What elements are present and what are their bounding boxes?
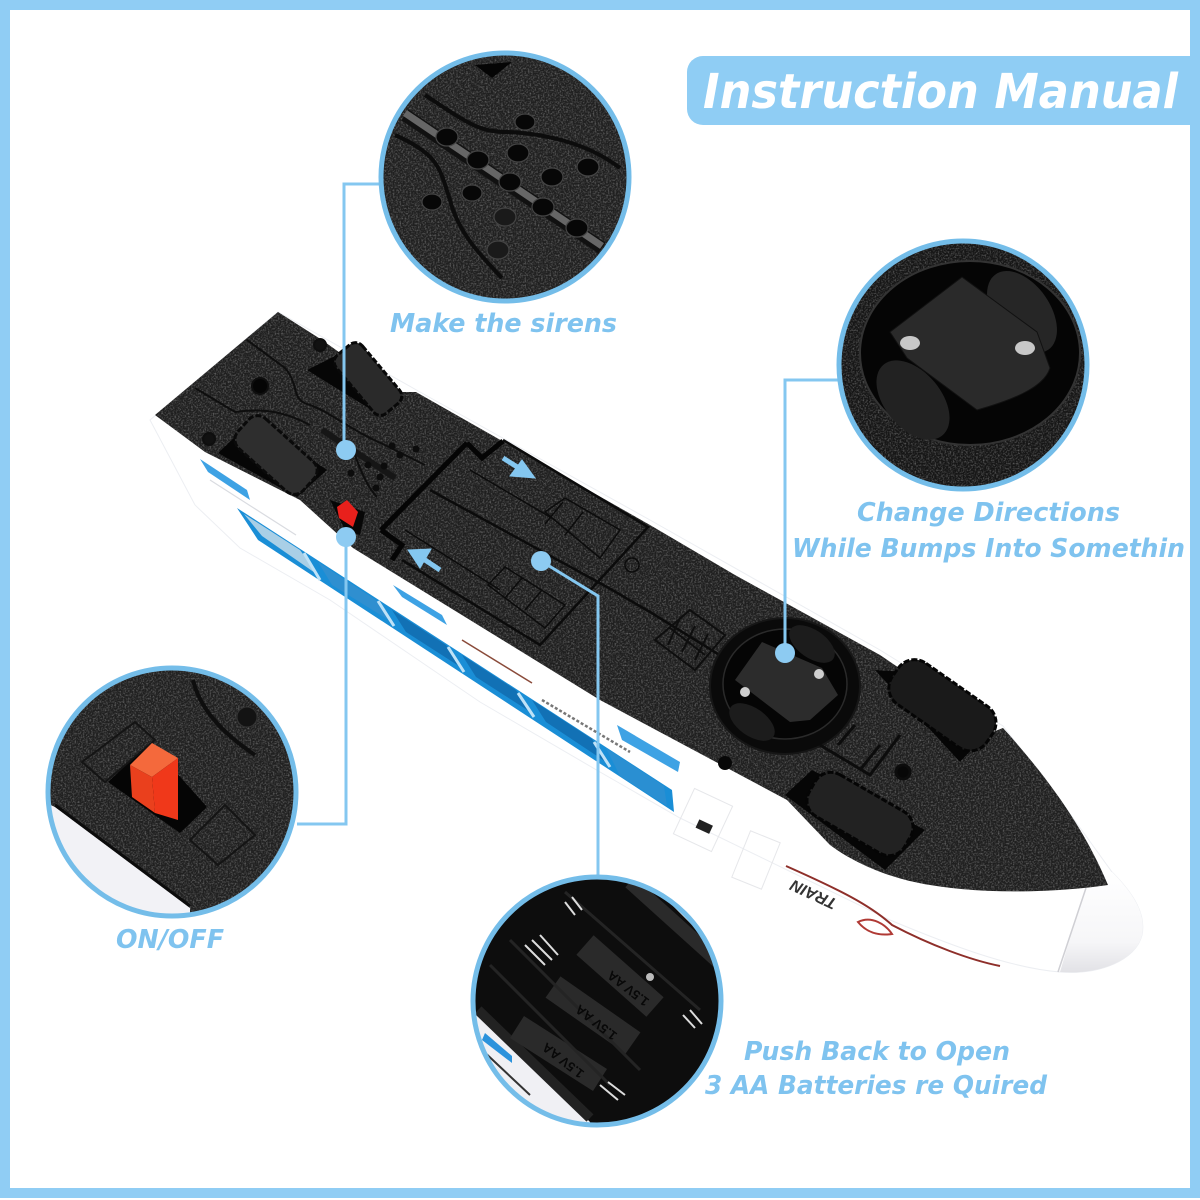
lower rear wheel <box>218 411 327 499</box>
caption: batteries: 3 AA Batteries re Quired <box>705 1071 1047 1101</box>
black underside panel <box>155 312 1108 891</box>
upper blue strip windows <box>200 459 680 772</box>
front steering wheel housing <box>710 618 860 754</box>
battery cover arrows <box>408 458 535 570</box>
red train logo <box>786 866 1000 966</box>
detail circle: battery compartment: 1.5V AA <box>539 1039 587 1081</box>
detail circle: battery compartment: 1.5V AA <box>604 967 652 1009</box>
front axle details <box>718 725 910 779</box>
upper front wheel <box>875 652 1004 762</box>
title banner: Instruction Manual <box>703 64 1179 120</box>
callout dot: switch <box>336 527 356 547</box>
callout dot: sirens <box>336 440 356 460</box>
train white body <box>150 312 1143 972</box>
callout line: steering wheel <box>785 380 838 653</box>
train toy, underside view <box>150 312 1143 972</box>
moulded grille <box>655 610 725 670</box>
battery cover <box>381 440 760 680</box>
caption: change directions <box>792 498 1185 564</box>
detail circle: on off switch <box>40 668 298 930</box>
callout line: sirens <box>344 184 382 450</box>
callout line: battery compartment <box>541 561 598 878</box>
lower front wheel <box>785 766 925 870</box>
detail circle: battery compartment <box>470 877 725 1130</box>
detail circle: steering wheel <box>838 240 1088 490</box>
window band <box>237 508 674 812</box>
caption: batteries: Push Back to Open <box>744 1037 1010 1067</box>
caption: on off: ON/OFF <box>116 925 224 955</box>
caption: sirens: Make the sirens <box>390 309 617 339</box>
detail circle: battery compartment: 1.5V AA <box>572 1001 620 1043</box>
caption: change directions: Change Directions <box>857 498 1120 528</box>
train nose tip <box>1060 872 1143 972</box>
caption: change directions: While Bumps Into Somethin <box>792 534 1185 564</box>
caption: batteries <box>705 1037 1047 1101</box>
body small print and stripes <box>210 480 780 889</box>
power switch on train <box>330 500 365 535</box>
callout line: on off switch <box>297 537 346 824</box>
upper rear wheel <box>307 339 405 419</box>
callout dot: steering <box>775 643 795 663</box>
red train logo: TRAIN <box>788 876 840 912</box>
detail circle: sirens speaker holes <box>380 52 630 302</box>
callout dot: battery <box>531 551 551 571</box>
train nose seam <box>1058 888 1086 972</box>
rear panel seams <box>195 339 425 497</box>
